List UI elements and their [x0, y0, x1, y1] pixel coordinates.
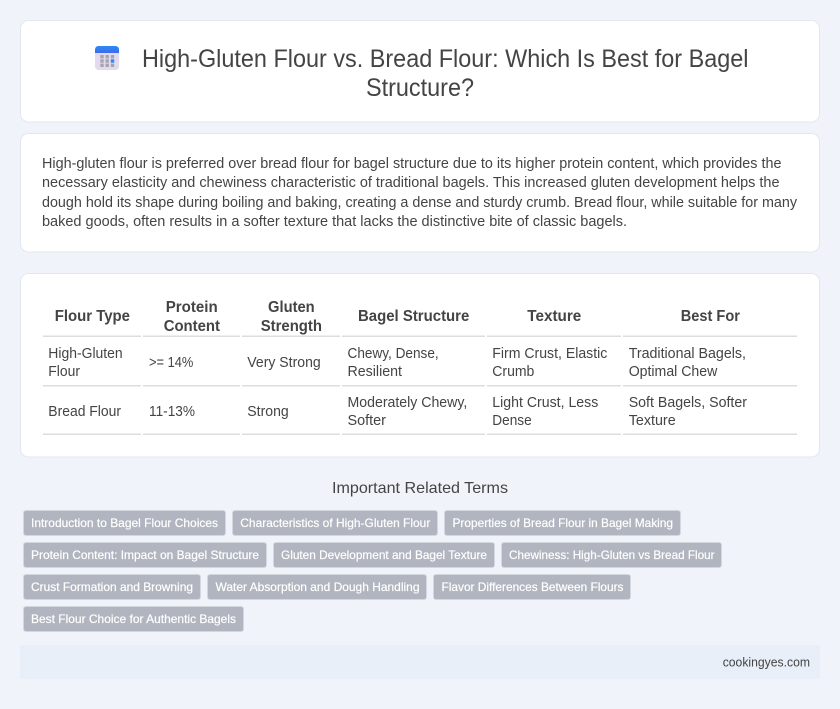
table row: bread flour: Moderately Chewy,	[348, 395, 467, 411]
table row: high-gluten flour: Traditional Bagels,	[629, 346, 746, 362]
tag	[24, 542, 266, 568]
tag	[502, 542, 722, 568]
table row: bread flour: Texture	[629, 413, 676, 429]
table row: bread flour: Light Crust, Less	[492, 395, 598, 411]
table row: high-gluten flour: Resilient	[348, 364, 402, 380]
tag: Flavor Differences Between Flours	[442, 580, 624, 594]
table header row: Content	[164, 318, 221, 335]
tag: Characteristics of High-Gluten Flour	[240, 516, 430, 530]
table header row: Protein	[166, 299, 218, 316]
table header row: Strength	[261, 318, 322, 335]
tag	[208, 574, 426, 600]
tag: Crust Formation and Browning	[31, 580, 193, 594]
panel: introduction text	[20, 134, 820, 252]
panel: introduction text: necessary elasticity and chewiness characteristic of traditional bagels. This increased gluten development helps the	[42, 175, 779, 191]
table row: high-gluten flour: Very Strong	[247, 355, 321, 371]
tag: Protein Content: Impact on Bagel Structure	[31, 548, 259, 562]
table row: high-gluten flour: Firm Crust, Elastic	[492, 346, 607, 362]
heading: related terms: Important Related Terms	[332, 480, 508, 497]
tag: Properties of Bread Flour in Bagel Making	[452, 516, 673, 530]
footer	[20, 645, 820, 679]
title: Structure?	[366, 74, 474, 102]
tag: Introduction to Bagel Flour Choices	[31, 516, 218, 530]
title	[142, 45, 748, 102]
tag: Chewiness: High-Gluten vs Bread Flour	[509, 548, 714, 562]
tag	[434, 574, 630, 600]
table row: high-gluten flour	[48, 346, 746, 380]
table row: bread flour: 11-13%	[149, 404, 195, 420]
related term tags	[24, 510, 722, 632]
table row: high-gluten flour: Optimal Chew	[629, 364, 718, 380]
title: High-Gluten Flour vs. Bread Flour: Which Is Best for Bagel	[142, 45, 748, 73]
panel: introduction text: baked goods, often results in a softer texture that lacks the distinctive bite of classic bagels.	[42, 214, 627, 230]
tag	[444, 510, 680, 536]
icon: calendar grid	[95, 46, 119, 70]
footer: cookingyes.com	[723, 656, 810, 670]
table row: bread flour: Bread Flour	[48, 404, 121, 420]
tag	[274, 542, 494, 568]
panel: introduction text: High-gluten flour is preferred over bread flour for bagel structure due to its higher protein content, which provides the	[42, 156, 782, 172]
table row: high-gluten flour: Chewy, Dense,	[348, 346, 439, 362]
table row: bread flour	[48, 395, 747, 429]
table header row: Gluten	[268, 299, 315, 316]
tag: Water Absorption and Dough Handling	[216, 580, 420, 594]
table header row: Flour Type	[55, 308, 130, 325]
panel: header	[20, 20, 820, 122]
table row: bread flour: Soft Bagels, Softer	[629, 395, 747, 411]
tag	[24, 510, 226, 536]
table header row: Best For	[681, 308, 740, 325]
tag	[24, 606, 244, 632]
tag: Gluten Development and Bagel Texture	[281, 548, 487, 562]
table row: high-gluten flour: >= 14%	[149, 355, 193, 371]
table header row: Texture	[527, 308, 581, 325]
table header row	[55, 299, 740, 335]
tag: Best Flour Choice for Authentic Bagels	[31, 612, 236, 626]
panel: comparison table	[20, 274, 820, 457]
table row: bread flour: Strong	[247, 404, 289, 420]
panel: introduction text: dough hold its shape during boiling and baking, creating a dense and sturdy crumb. Bread flour, while suitable for many	[42, 195, 798, 211]
table row: high-gluten flour: Crumb	[492, 364, 534, 380]
table row: high-gluten flour: Flour	[48, 364, 80, 380]
tag	[24, 574, 200, 600]
table row: high-gluten flour: High-Gluten	[48, 346, 123, 362]
table row: bread flour: Dense	[492, 413, 532, 429]
table header row: Bagel Structure	[358, 308, 469, 325]
table row: bread flour: Softer	[348, 413, 386, 429]
tag	[232, 510, 438, 536]
